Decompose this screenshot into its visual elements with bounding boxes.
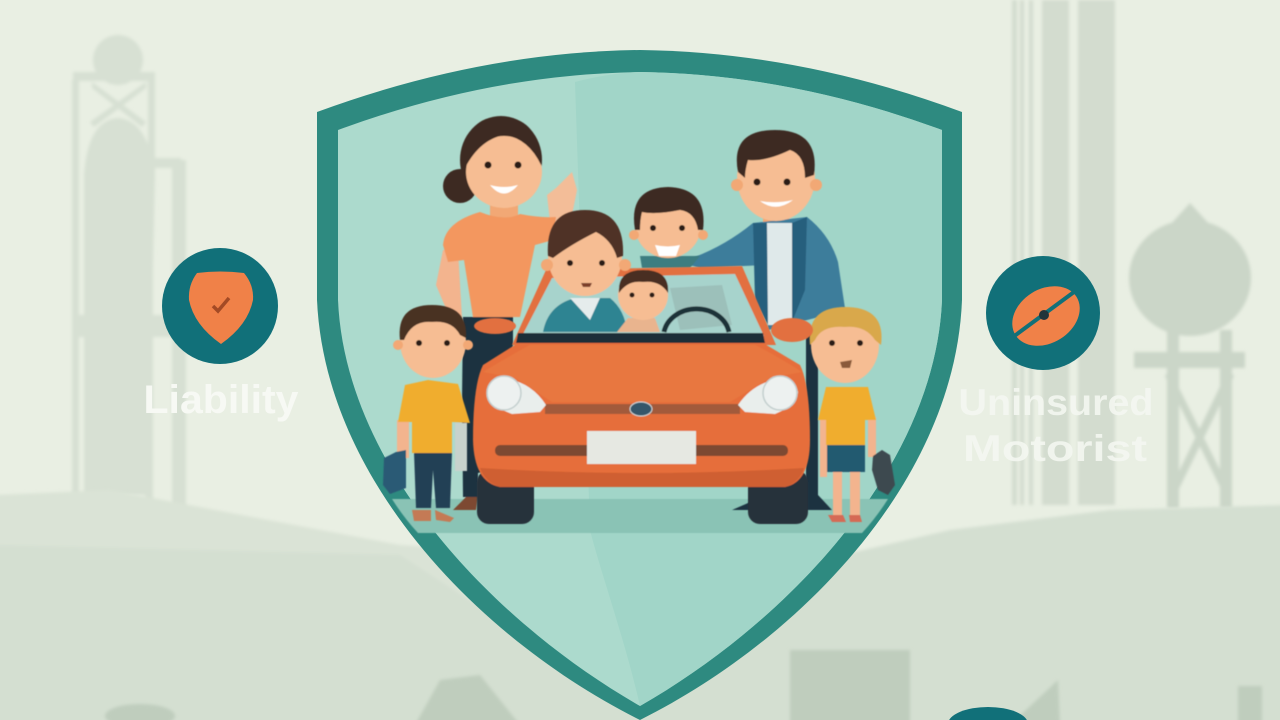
- bun: [443, 169, 477, 203]
- woman: [436, 116, 577, 510]
- head: [811, 307, 879, 383]
- windshield frame and glass: [512, 266, 776, 345]
- headlights: [487, 378, 546, 414]
- head: [460, 116, 542, 204]
- arms: [820, 417, 827, 477]
- bottom buildings silhouette: [105, 650, 1262, 720]
- shirt: [398, 380, 470, 453]
- icon: uninsured motorist: [986, 256, 1100, 370]
- right chimneys silhouette: [1012, 0, 1115, 505]
- legs: [462, 317, 513, 497]
- shield: [317, 50, 962, 720]
- left tower silhouette: [72, 35, 186, 548]
- toddler in car: [617, 270, 668, 332]
- jacket: [680, 217, 846, 330]
- steering wheel: [664, 309, 729, 332]
- grille line: [545, 404, 740, 414]
- dark window band: [516, 333, 765, 343]
- arm: [397, 420, 409, 458]
- body: [473, 343, 810, 487]
- shirt: [767, 223, 792, 325]
- bag: [383, 450, 406, 494]
- man: [680, 130, 846, 510]
- right water tower silhouette: [1129, 203, 1251, 508]
- raised forearm and hand: [547, 172, 577, 225]
- label: Uninsured Motorist: Motorist: [963, 428, 1147, 469]
- hills: [0, 490, 1280, 720]
- car: [473, 210, 813, 524]
- top: [443, 212, 556, 317]
- trousers: [414, 452, 452, 508]
- grey strip: [455, 423, 467, 471]
- left child: [383, 305, 473, 522]
- left arm: [436, 250, 462, 318]
- badge: [630, 402, 652, 416]
- plate: [587, 431, 696, 464]
- icon: liability shield: [162, 248, 278, 364]
- bag: [872, 450, 895, 495]
- label: Liability: Liability: [144, 378, 299, 422]
- partial icon bottom: [948, 707, 1028, 720]
- boy behind car: [629, 187, 708, 268]
- bumper intake: [495, 445, 788, 456]
- head: [737, 135, 815, 221]
- mirrors: [474, 318, 516, 334]
- lower lip: [480, 468, 804, 487]
- wheels: [477, 470, 534, 524]
- head: [400, 306, 466, 378]
- boy in car: [541, 210, 631, 332]
- right child: [810, 307, 895, 522]
- label: Uninsured Motorist: [958, 382, 1154, 469]
- ground shadow: [392, 499, 888, 533]
- shirt: [818, 387, 876, 445]
- label: Uninsured Motorist: Uninsured: [958, 382, 1154, 423]
- neck: [490, 200, 518, 225]
- hood shading: [483, 345, 802, 402]
